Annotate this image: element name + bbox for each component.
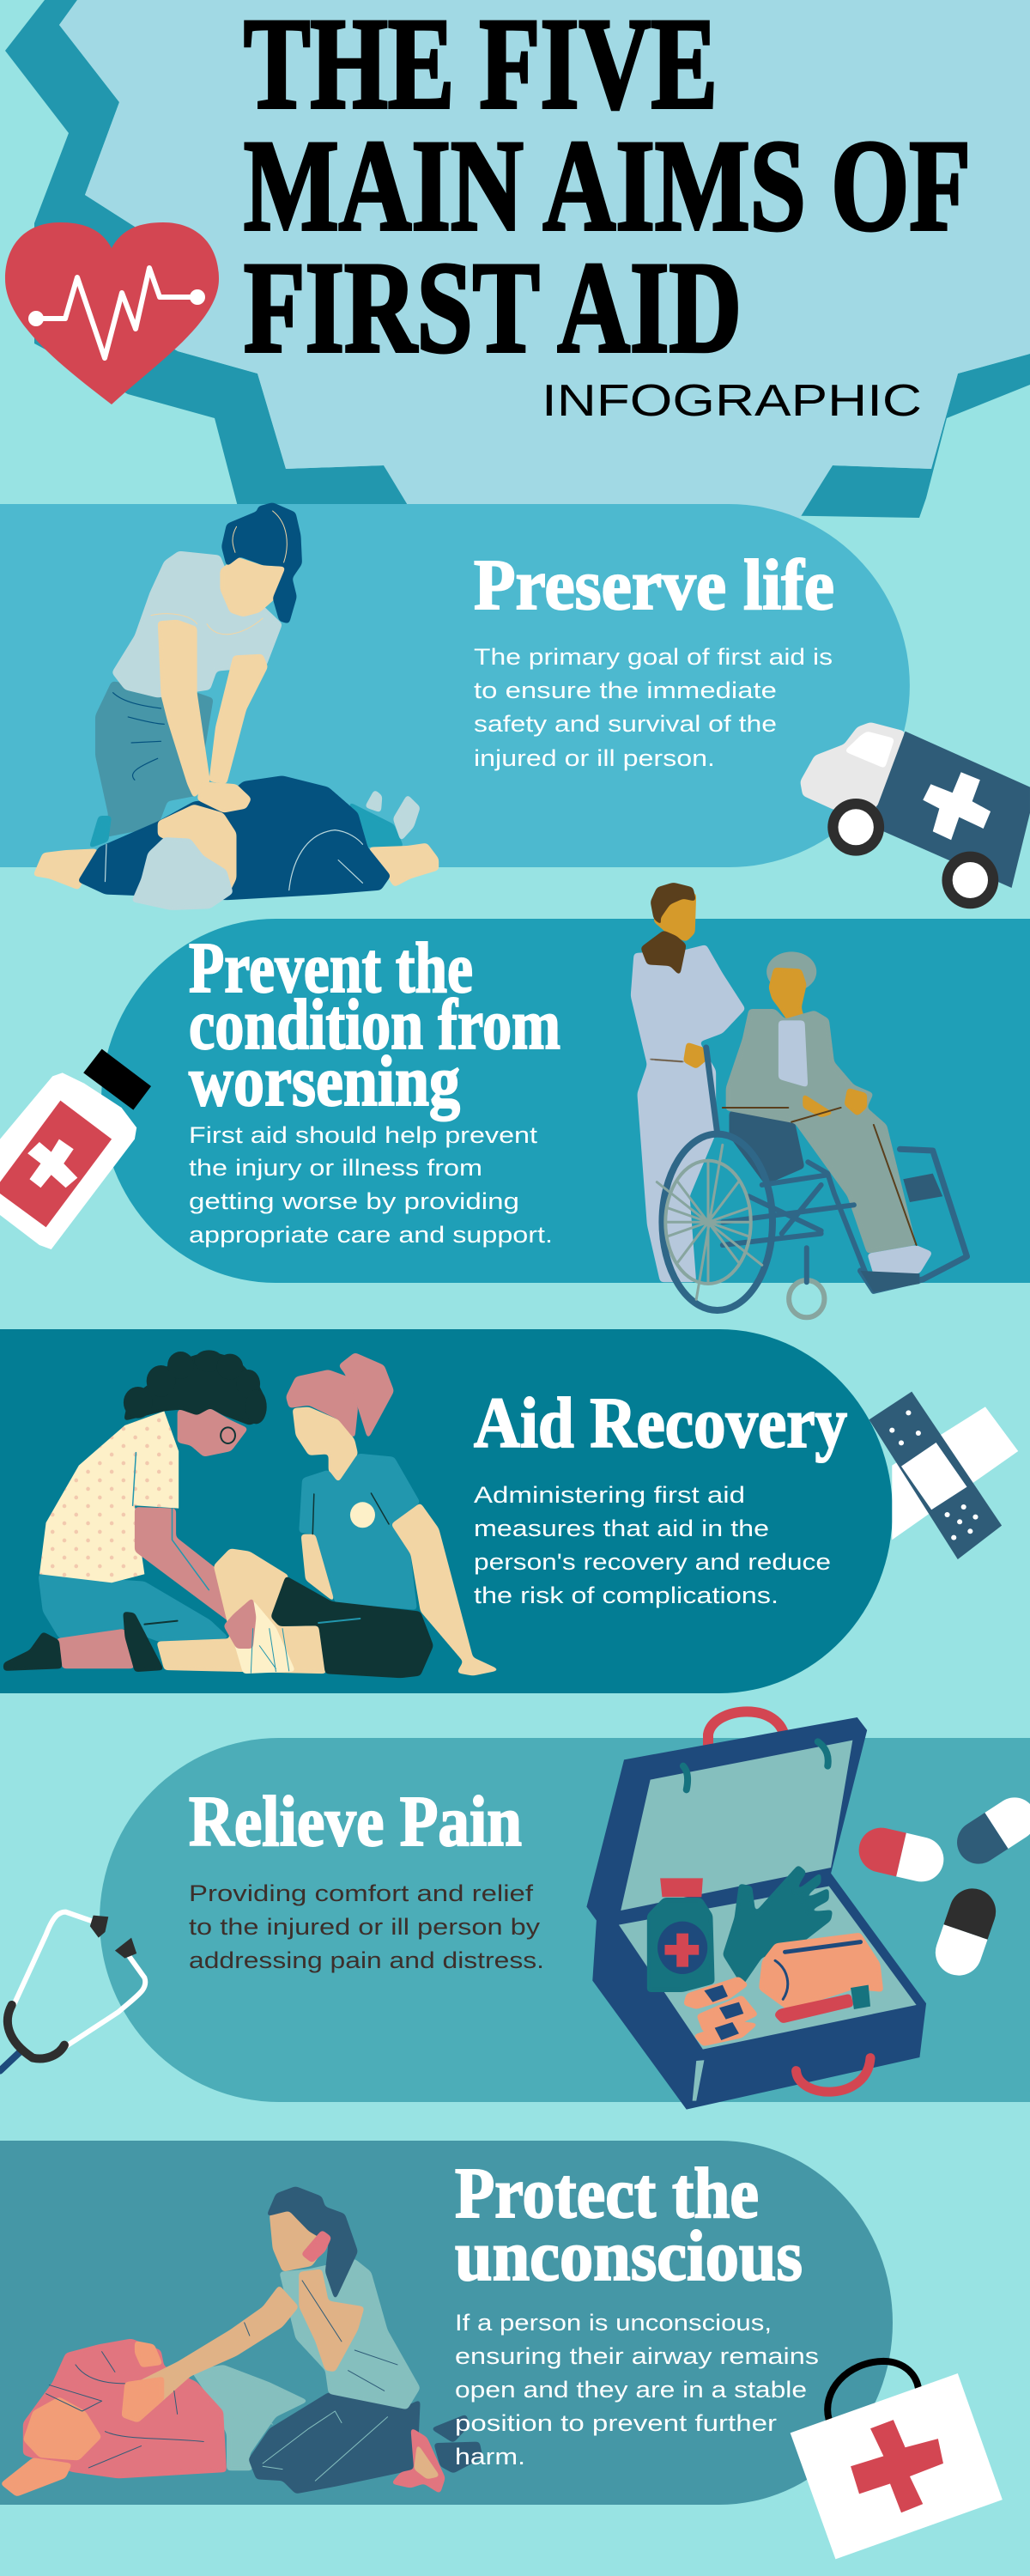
body text: If a person is unconscious, [455,2310,772,2336]
body text: measures that aid in the [474,1516,769,1541]
heading: Relieve Pain [189,1782,522,1862]
body text [474,644,833,771]
icon: stethoscope [0,1912,145,2071]
heading: Protect the [455,2154,759,2233]
body text: to the injured or ill person by [189,1914,541,1940]
panel: preserve life [0,502,1030,910]
icon: pills [854,1789,1030,1982]
panel: relieve pain [0,1711,1030,2110]
body text: The primary goal of first aid is [474,644,833,670]
heading [189,928,560,1121]
subtitle: INFOGRAPHIC [542,376,922,426]
header shape with jagged border [5,0,1030,518]
body text: Providing comfort and relief [189,1880,534,1906]
body text: appropriate care and support. [189,1222,553,1248]
body text: injured or ill person. [474,745,715,771]
panel: prevent the condition from worsening [0,883,1030,1317]
icon: medicine bottle [0,1049,151,1249]
illustration: CPR [33,502,439,910]
title [244,0,971,380]
body text [189,1122,553,1248]
heading: Aid Recovery [474,1383,847,1463]
heading: worsening [189,1042,460,1121]
title: FIRST AID [244,235,742,380]
panel: aid recovery [0,1329,1018,1693]
body text [189,1880,544,1973]
body text [474,1482,831,1608]
body text: ensuring their airway remains [455,2343,819,2369]
heading: Preserve life [474,545,834,625]
heading: unconscious [455,2216,803,2296]
heading [455,2154,803,2296]
heading: condition from [189,985,560,1065]
body text: to ensure the immediate [474,677,777,703]
illustration: first aid kit [586,1711,926,2110]
body text: First aid should help prevent [189,1122,538,1148]
body text: the injury or illness from [189,1155,482,1181]
body text: safety and survival of the [474,711,777,737]
body text: getting worse by providing [189,1188,519,1214]
illustration: recovery position and phone call [0,2186,482,2497]
body text [455,2310,819,2470]
body text: addressing pain and distress. [189,1947,544,1973]
body text: the risk of complications. [474,1583,779,1608]
heading: Prevent the [189,928,473,1008]
body text: open and they are in a stable [455,2377,807,2403]
icon: bandage [869,1392,1018,1559]
body text: harm. [455,2444,525,2470]
icon: first aid bag [791,2361,1003,2559]
panel: protect the unconscious [0,2141,1003,2559]
body text: person's recovery and reduce [474,1549,831,1575]
icon: heart with pulse [5,222,219,404]
illustration: nurse and wheelchair [631,883,967,1317]
body text: Administering first aid [474,1482,745,1508]
illustration: bandaging a knee [3,1350,500,1678]
icon: ambulance [800,722,1030,908]
body text: position to prevent further [455,2410,777,2436]
